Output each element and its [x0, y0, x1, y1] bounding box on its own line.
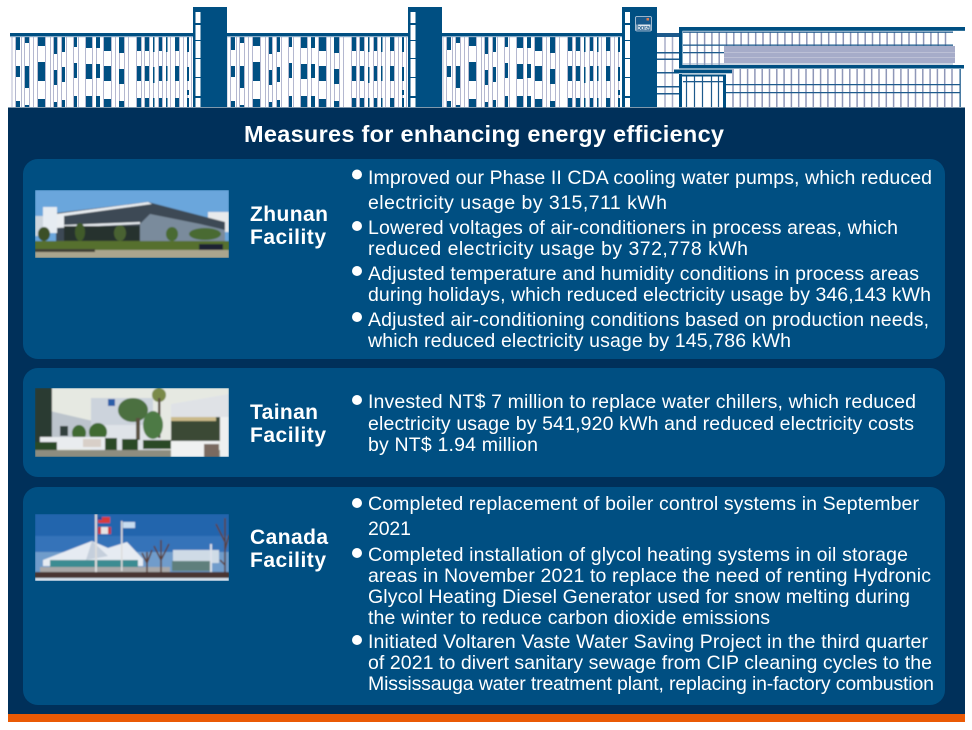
- bullet list: Tainan: electricity usage by 541,920 kWh and reduced electricity costs: [368, 413, 914, 435]
- bullet list: Tainan: by NT$ 1.94 million: [368, 434, 538, 456]
- bullet list: Canada: 2021: [368, 518, 411, 540]
- panel: Canada Facility: [23, 487, 945, 705]
- icon: company logo on tower: [636, 16, 652, 32]
- bullet list: Zhunan: Improved our Phase II CDA cooling water pumps, which reduced: [368, 167, 932, 189]
- bullet list: Canada: Completed replacement of boiler control systems in September: [368, 493, 920, 515]
- bullet list: Canada: [352, 493, 934, 695]
- bullet list: Tainan: Invested NT$ 7 million to replace water chillers, which reduced: [368, 391, 916, 413]
- bullet list: Canada: Initiated Voltaren Vaste Water Saving Project in the third quarter: [368, 631, 928, 653]
- photo: Canada facility: [35, 514, 229, 581]
- photo: Zhunan facility: [35, 190, 229, 258]
- title: Measures for enhancing energy efficiency: [244, 121, 724, 147]
- label: Canada Facility: Facility: [250, 549, 326, 572]
- panel: Tainan Facility: [23, 368, 945, 477]
- bullet list: Canada: Mississauga water treatment plant, replacing in-factory combustion: [368, 673, 934, 695]
- label: Zhunan Facility: Facility: [250, 226, 326, 249]
- label: Canada Facility: Canada: [250, 526, 328, 549]
- label: Canada Facility: [250, 526, 328, 572]
- bullet list: Zhunan: reduced electricity usage by 372,778 kWh: [368, 238, 748, 260]
- orange footer bar: [8, 714, 965, 722]
- bullet list: Canada: the winter to reduce carbon dioxide emissions: [368, 607, 770, 629]
- bullet list: Zhunan: which reduced electricity usage by 145,786 kWh: [367, 330, 791, 352]
- photo: Tainan facility: [35, 388, 229, 457]
- label: Tainan Facility: Facility: [250, 424, 326, 447]
- icon: company logo on tower: bora: [637, 25, 650, 32]
- bullet list: Tainan: [352, 391, 916, 456]
- bullet list: Zhunan: Adjusted temperature and humidity conditions in process areas: [368, 263, 919, 285]
- bullet list: Zhunan: [352, 167, 932, 352]
- label: Zhunan Facility: [250, 203, 328, 249]
- building illustration header: [10, 7, 965, 108]
- label: Zhunan Facility: Zhunan: [250, 203, 328, 226]
- bullet list: Canada: of 2021 to divert sanitary sewage from CIP cleaning cycles to the: [368, 652, 932, 674]
- bullet list: Zhunan: Lowered voltages of air-conditioners in process areas, which: [368, 217, 898, 239]
- bullet list: Canada: Completed installation of glycol heating systems in oil storage: [368, 544, 908, 566]
- bullet list: Zhunan: during holidays, which reduced electricity usage by 346,143 kWh: [368, 284, 931, 306]
- bullet list: Canada: Glycol Heating Diesel Generator used for snow melting during: [368, 586, 910, 608]
- bullet list: Zhunan: electricity usage by 315,711 kWh: [368, 192, 667, 214]
- label: Tainan Facility: [250, 401, 326, 447]
- right office building: [657, 27, 965, 108]
- bullet list: Canada: areas in November 2021 to replace the need of renting Hydronic: [368, 565, 931, 587]
- bullet list: Zhunan: Adjusted air-conditioning conditions based on production needs,: [368, 309, 929, 331]
- label: Tainan Facility: Tainan: [250, 401, 318, 424]
- panel: Zhunan Facility: [23, 159, 945, 359]
